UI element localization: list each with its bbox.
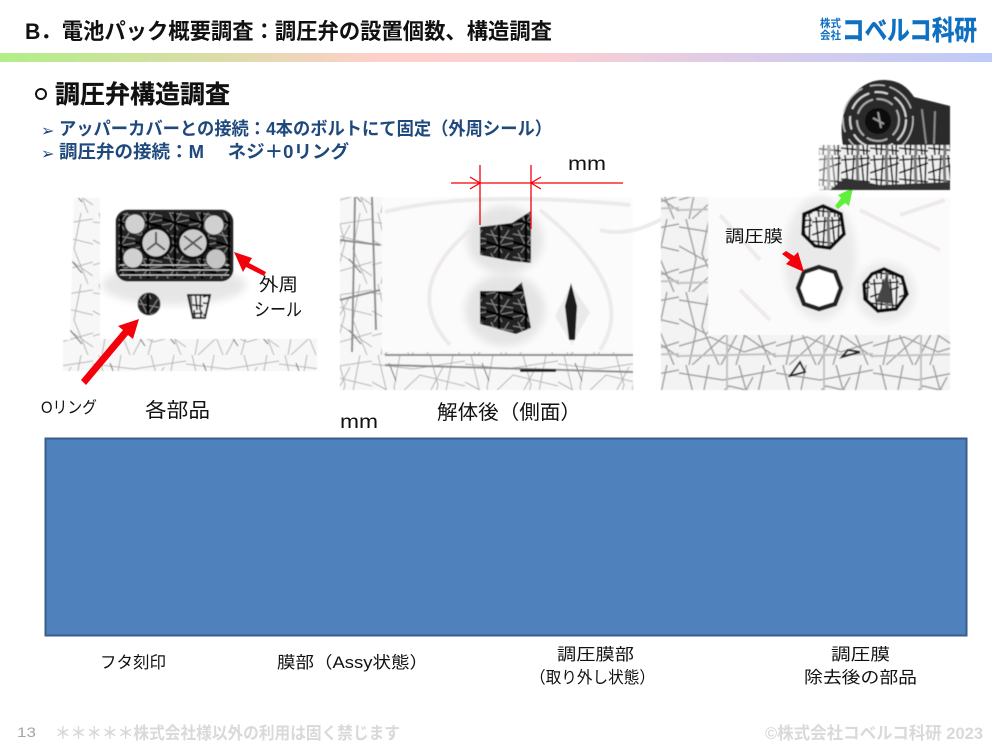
upper part [480, 211, 531, 263]
label: diaphragm: 調圧膜 [725, 227, 783, 246]
mm label above blue panel: mm [340, 412, 378, 433]
caption: diaphragm removed: （取り外し状態） [530, 668, 655, 687]
spindle part [555, 285, 590, 345]
upper part [803, 206, 844, 248]
coil [842, 80, 950, 145]
caption: parts after removing diaphragm: 調圧膜 [831, 645, 890, 664]
caption: parts after removing diaphragm [804, 645, 917, 687]
caption: membrane assembly: 膜部（Assy状態） [277, 653, 428, 672]
dimension arrows [451, 165, 623, 229]
photo: side view after disassembly [340, 197, 690, 390]
caption: lid marking: フタ刻印 [100, 653, 166, 672]
page number: 13 [17, 724, 36, 740]
title: B．電池パック概要調査：調圧弁の設置個数、構造調査 [25, 19, 552, 44]
frame sketch [340, 197, 633, 390]
copyright: ©株式会社コベルコ科研 2023 [765, 724, 983, 743]
arrow: to enlarged view [835, 188, 853, 209]
label: outer seal: 外周 [259, 275, 298, 295]
bullet: upper cover connection: アッパーカバーとの接続：4本のボルトにて固定（外周シール） [59, 118, 552, 139]
bullet: upper cover connection: ➢ [41, 123, 54, 140]
photo: enlarged part [819, 80, 950, 190]
photo: parts [30, 197, 318, 373]
right part [864, 269, 907, 311]
label: outer seal [254, 275, 302, 320]
base [819, 145, 950, 190]
logo: Kobelco Research Institute: 会社 [820, 28, 841, 42]
arrow: outer seal [234, 252, 266, 276]
caption: parts after removing diaphragm: 除去後の部品 [804, 668, 917, 687]
caption: diaphragm removed [530, 645, 655, 687]
logo: Kobelco Research Institute: 株式 [820, 16, 841, 30]
bullet: valve connection: 調圧弁の接続：M ネジ＋0リング [59, 141, 349, 162]
blue masked panel [46, 438, 966, 636]
label: o-ring: Oリング [41, 398, 97, 417]
arrow: diaphragm [782, 251, 804, 272]
frame sketch [63, 198, 317, 371]
photo: top view after disassembly [661, 196, 950, 390]
logo: Kobelco Research Institute: コベルコ科研 [842, 16, 977, 46]
caption: diaphragm removed: 調圧膜部 [557, 645, 634, 664]
caption: side view: 解体後（側面） [437, 401, 581, 424]
o-ring part [138, 293, 160, 315]
valve part [188, 295, 210, 318]
bullet: valve connection: ➢ [41, 146, 54, 163]
cover with bolts [117, 211, 232, 280]
gradient header bar [0, 53, 992, 62]
lower part [480, 282, 531, 334]
caption: parts: 各部品 [145, 399, 210, 422]
dimension label: mm: mm [568, 154, 606, 175]
frame sketch [661, 197, 950, 390]
diaphragm ring [798, 267, 841, 309]
label: outer seal: シール [254, 300, 302, 320]
section heading: 調圧弁構造調査 [55, 81, 230, 109]
arrow: o-ring [81, 319, 139, 385]
confidentiality notice: ＊＊＊＊＊株式会社様以外の利用は固く禁じます [55, 723, 400, 743]
